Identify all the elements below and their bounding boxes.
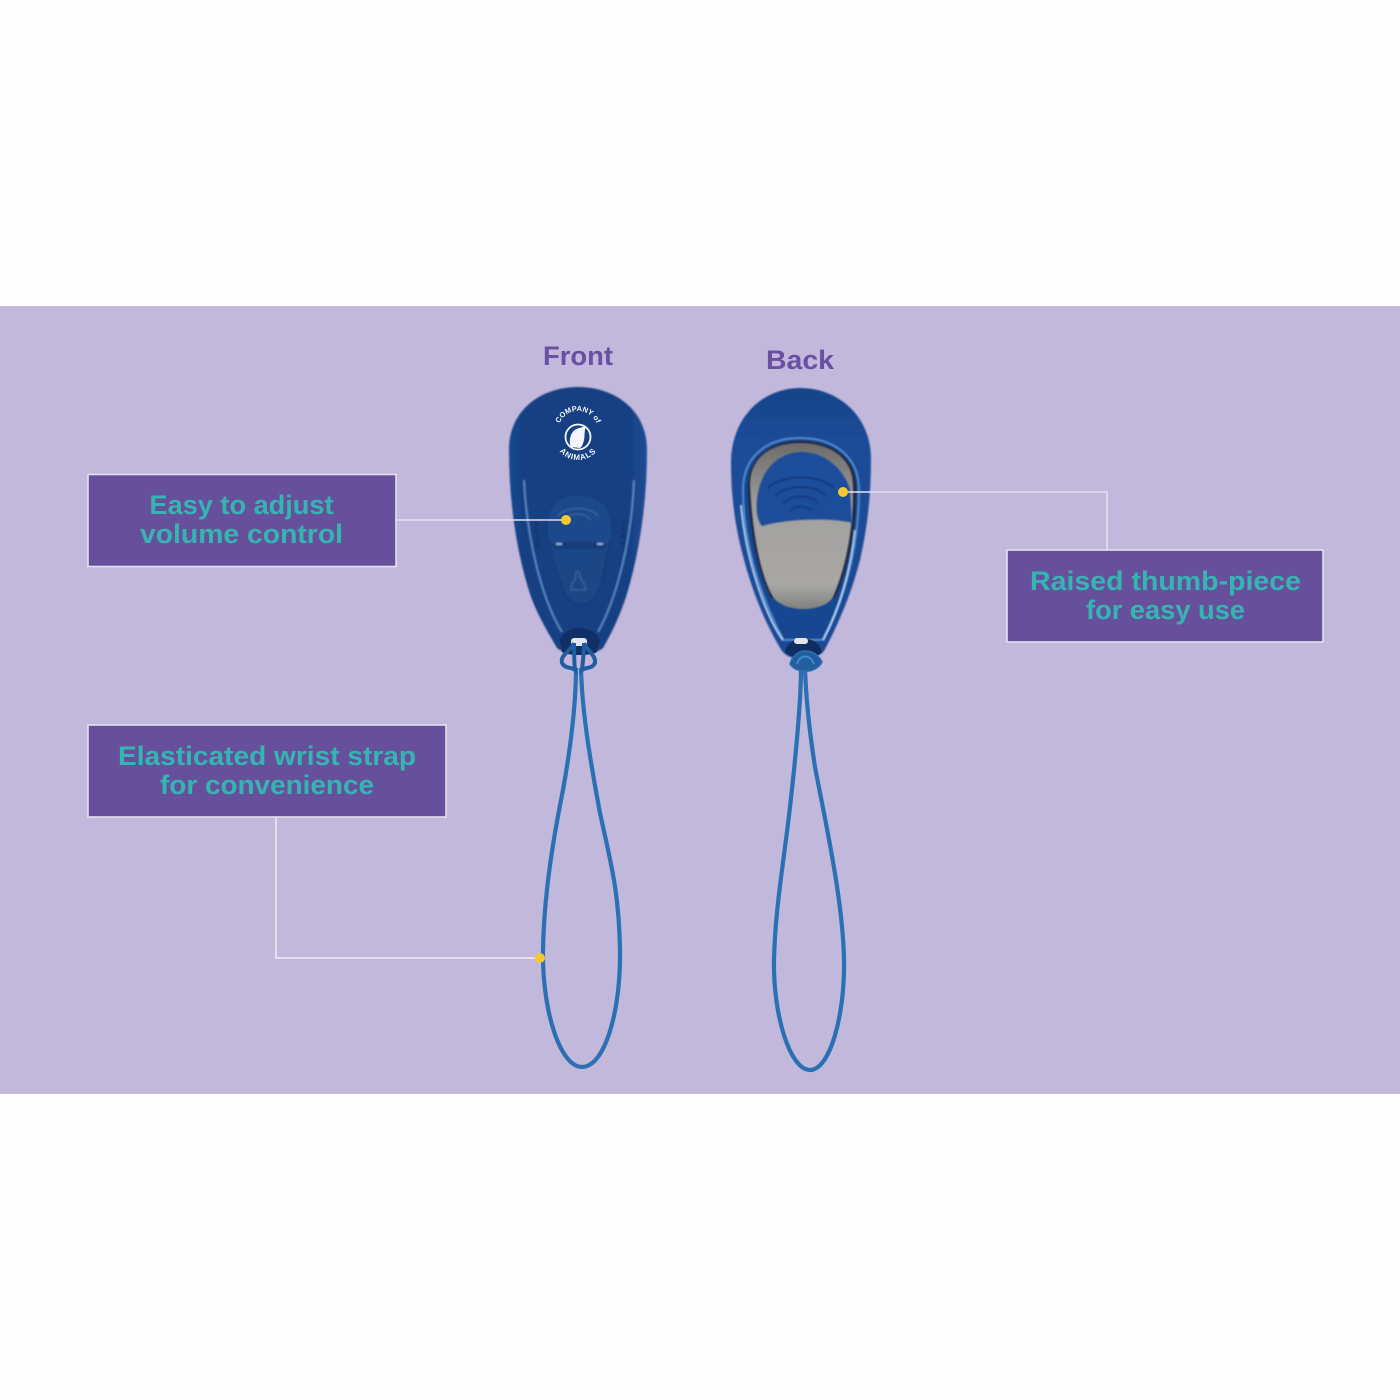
clicker body	[509, 387, 647, 654]
connector: volume control	[396, 515, 571, 525]
callout: volume control	[88, 474, 396, 566]
dark recess shadow	[748, 441, 856, 598]
callout: volume control: volume control	[140, 519, 343, 549]
callout: wrist strap: for convenience	[160, 770, 374, 800]
wrist strap: front	[543, 668, 620, 1067]
logo: Company of Animals: COMPANY of	[556, 406, 602, 423]
recessed rim	[743, 438, 859, 640]
grey metal plate	[750, 443, 853, 609]
thumb piece	[757, 452, 852, 526]
connector: wrist strap	[276, 817, 545, 963]
strap knot	[785, 638, 822, 671]
wrist strap: back	[774, 668, 844, 1070]
body highlight	[524, 480, 562, 632]
connector: thumb piece	[838, 487, 1107, 550]
callout: wrist strap: Elasticated wrist strap	[118, 741, 416, 771]
clicker: front view	[508, 386, 648, 675]
body highlight	[741, 505, 855, 640]
callout: thumb piece: for easy use	[1086, 595, 1245, 625]
logo: Company of Animals: ANIMALS	[560, 448, 596, 460]
callout: wrist strap	[88, 725, 446, 817]
callout: thumb piece	[1007, 550, 1323, 642]
callout: volume control: Easy to adjust	[150, 490, 334, 520]
heading: Back: Back	[766, 345, 835, 375]
volume slider	[547, 495, 612, 604]
clicker body	[731, 388, 871, 659]
clicker: back view	[731, 388, 871, 671]
strap knot	[560, 628, 600, 670]
heading: Front: Front	[543, 341, 613, 371]
volume marks	[536, 520, 624, 550]
background panel	[0, 306, 1400, 1094]
callout: thumb piece: Raised thumb-piece	[1030, 566, 1301, 596]
logo: Company of Animals	[556, 406, 602, 460]
